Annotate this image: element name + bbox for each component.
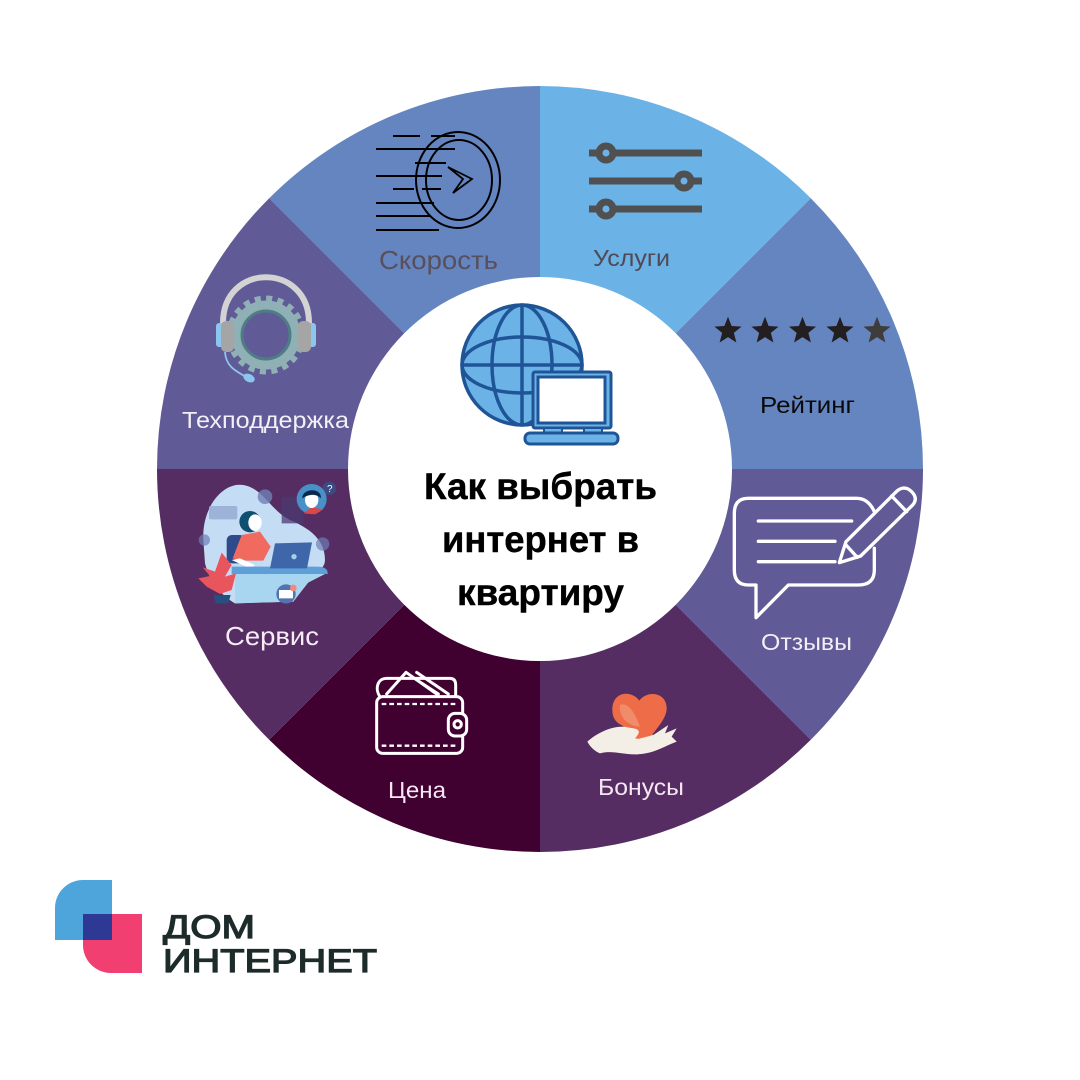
label: tech support: Техподдержка [182, 407, 349, 433]
segment: customer service [157, 469, 540, 740]
segment: price [269, 469, 540, 852]
panel: wheel of segments [157, 86, 923, 852]
logo wordmark: ИНТЕРНЕТ [163, 943, 377, 979]
segment: speed [269, 86, 540, 469]
logo: Дом Интернет [55, 880, 377, 979]
icon: review speech bubble with pencil [734, 488, 915, 618]
logo wordmark [163, 909, 377, 979]
label: customer service: Сервис [225, 621, 319, 651]
icon: headset with gear [216, 277, 316, 384]
icon: wallet [377, 672, 467, 753]
icon: sliders [589, 142, 702, 220]
icon: hand holding heart [587, 694, 677, 754]
label: reviews: Отзывы [761, 629, 852, 655]
segment: tech support [157, 198, 540, 469]
icon: operator at a laptop illustration [198, 482, 336, 604]
title: квартиру [457, 572, 624, 613]
title: Как выбрать [424, 466, 657, 507]
segment: rating [540, 198, 923, 469]
label: services: Услуги [593, 245, 670, 271]
label: price: Цена [388, 777, 446, 803]
title: интернет в [442, 519, 639, 560]
title [424, 466, 657, 613]
icon: globe and laptop [462, 305, 618, 444]
label: rating: Рейтинг [760, 392, 855, 418]
logo mark [55, 880, 142, 973]
label: speed: Скорость [379, 245, 498, 275]
icon: operator at a laptop illustration: ? [327, 484, 333, 495]
segment: bonuses [540, 469, 811, 852]
label: bonuses: Бонусы [598, 774, 684, 800]
segment: reviews [540, 469, 923, 740]
segment: services [540, 86, 811, 469]
center white circle [348, 277, 732, 661]
icon: five stars [714, 317, 891, 343]
logo wordmark: ДОМ [163, 909, 255, 945]
icon: speed circle with motion lines [376, 132, 500, 230]
